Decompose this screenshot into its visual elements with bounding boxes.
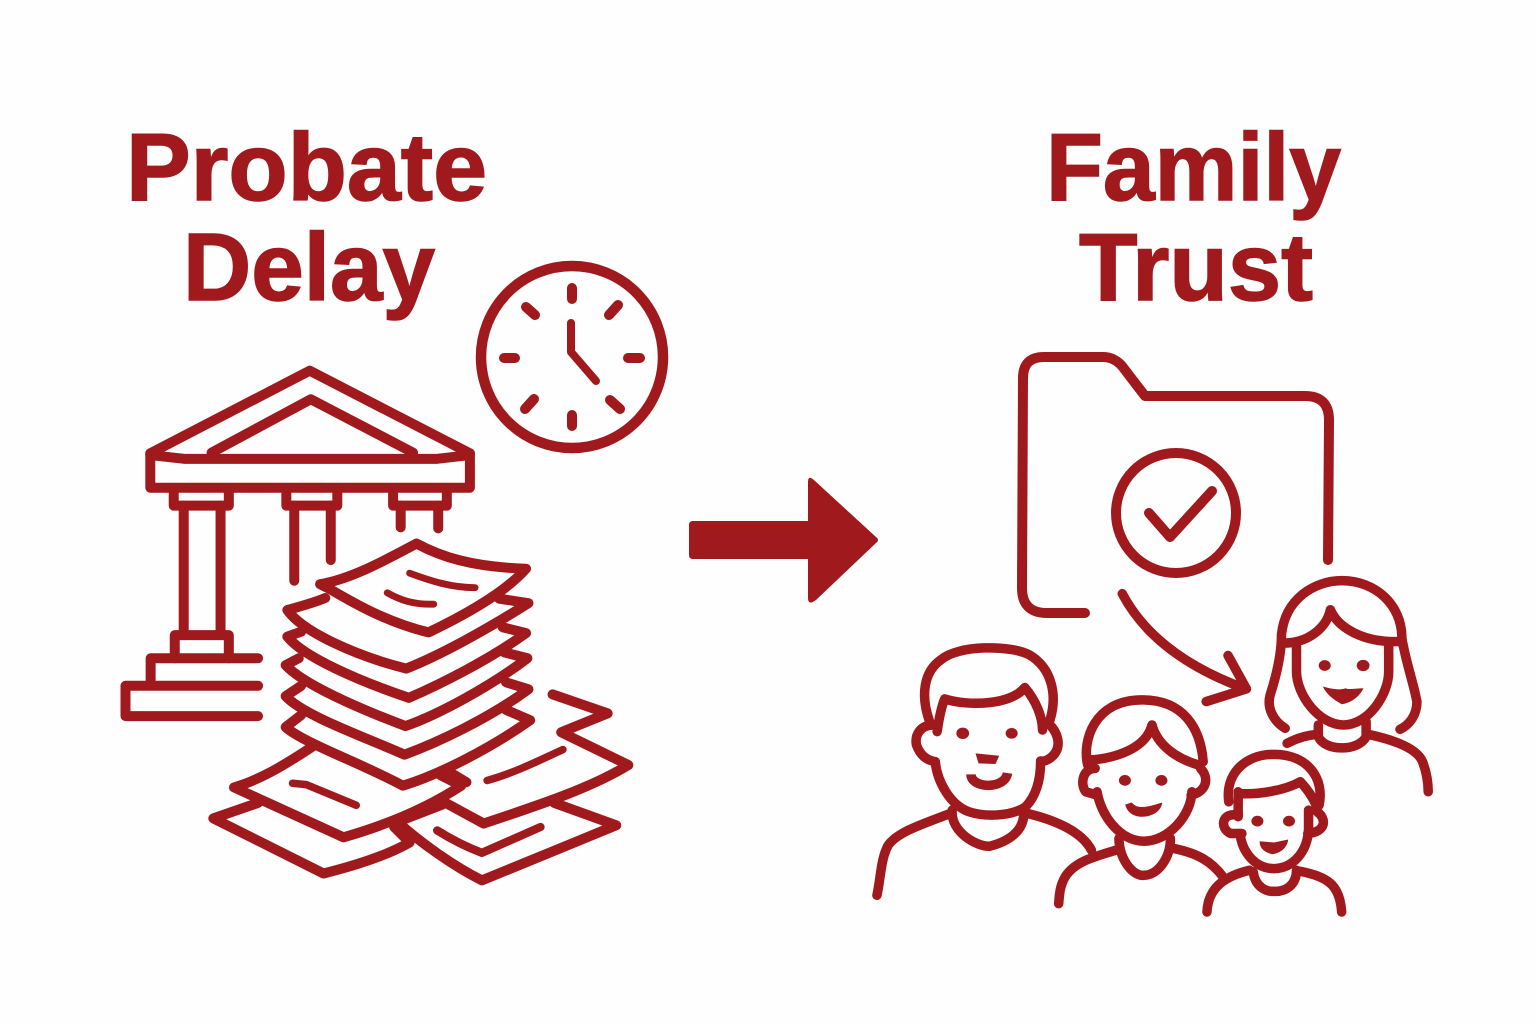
arrow: probate to trust: [689, 478, 878, 603]
icon: clock: [481, 266, 663, 448]
arrow: folder to family: [1122, 594, 1246, 702]
heading: Family Trust: [1046, 114, 1341, 321]
heading: Probate Delay: [126, 114, 487, 321]
icon: family: [877, 581, 1428, 912]
icon: folder with check: [1022, 357, 1329, 613]
person: younger child: [1207, 754, 1342, 912]
person: man: [877, 648, 1091, 895]
heading: Family Trust: Family: [1046, 114, 1341, 221]
person: older child: [1059, 700, 1223, 904]
icon: courthouse: [125, 371, 470, 716]
person: woman: [1269, 581, 1428, 792]
icon: paper stack: [213, 544, 628, 880]
heading: Probate Delay: Delay: [183, 214, 435, 321]
heading: Probate Delay: Probate: [126, 114, 487, 221]
heading: Family Trust: Trust: [1079, 214, 1313, 321]
